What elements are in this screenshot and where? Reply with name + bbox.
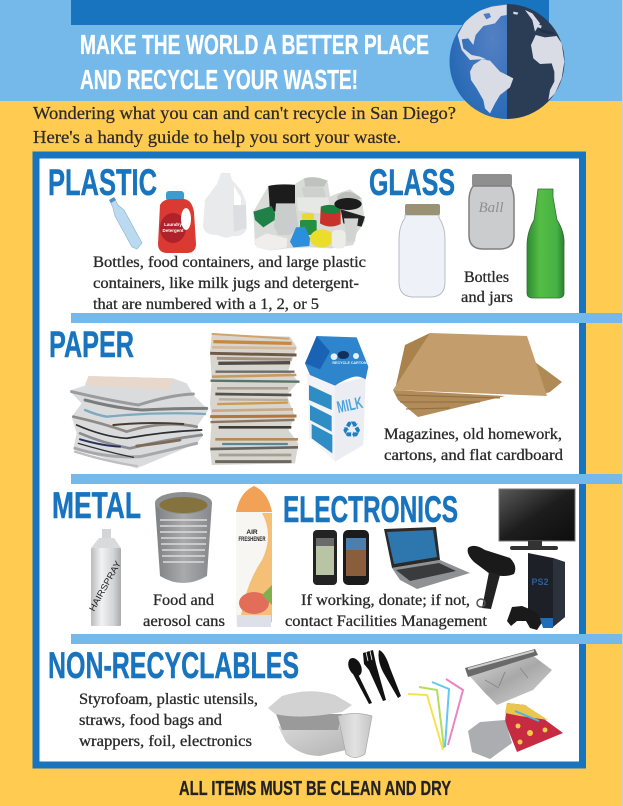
icon: hairspray can: HAIRSPRAY [87, 559, 123, 613]
icon: magazine stack [69, 376, 208, 468]
paper description: cartons, and flat cardboard [384, 447, 563, 464]
icon: detergent bottle: Detergent [162, 228, 184, 233]
glass description: Bottles [464, 269, 509, 286]
plastic description [93, 254, 366, 313]
panel: glass [369, 162, 564, 306]
icon: smartphones [313, 530, 369, 585]
icon: ball jar: Ball [478, 200, 504, 216]
icon: clear jar [399, 204, 445, 297]
icon: food wrapper [468, 703, 563, 759]
recycle mark: ♻ [342, 417, 362, 443]
heading: paper: PAPER [49, 324, 134, 365]
heading: metal: METAL [52, 485, 141, 526]
panel: plastic [48, 162, 366, 313]
non-recyclables description: wrappers, foil, electronics [79, 733, 252, 750]
icon: detergent bottle: Laundry [164, 222, 182, 227]
icon: foil roll [465, 649, 552, 705]
heading: non-recyclables: NON-RECYCLABLES [48, 645, 299, 686]
icon: air freshener: AIR [246, 529, 258, 536]
main frame [36, 155, 582, 765]
icon: plastic containers [253, 177, 365, 251]
non-recyclables description [79, 691, 258, 750]
icon: game console: PS2 [531, 577, 549, 587]
icon: milk jug [203, 173, 247, 238]
title: AND RECYCLE YOUR WASTE! [80, 64, 358, 95]
icon: hair dryer [468, 546, 515, 609]
plastic description: Bottles, food containers, and large plastic [93, 254, 366, 271]
icon: air freshener: FRESHENER [238, 537, 266, 543]
heading: electronics: ELECTRONICS [283, 489, 458, 530]
icon: milk carton: MILK [335, 393, 365, 417]
icon: cardboard [393, 333, 562, 417]
title: MAKE THE WORLD A BETTER PLACE [80, 29, 429, 60]
footer note: ALL ITEMS MUST BE CLEAN AND DRY [179, 777, 451, 800]
title [80, 29, 429, 95]
paper description [384, 426, 563, 464]
icon: plastic cutlery [346, 650, 401, 704]
panel: non-recyclables [48, 645, 563, 759]
panel: electronics [283, 489, 575, 630]
intro text: Here's a handy guide to help you sort your waste. [33, 127, 401, 147]
icon: straws [408, 679, 463, 750]
metal description: Food and [153, 592, 214, 609]
icon: globe [449, 4, 565, 120]
icon: hairspray can [87, 529, 123, 626]
electronics description: contact Facilities Management [285, 613, 488, 630]
icon: game controller [507, 606, 541, 630]
icon: laptop [384, 527, 470, 589]
icon: television [499, 489, 575, 550]
electronics description [285, 592, 488, 630]
metal description [143, 592, 225, 630]
panel: metal [52, 485, 272, 630]
icon: detergent bottle [158, 191, 196, 253]
plastic description: that are numbered with a 1, 2, or 5 [93, 296, 319, 313]
icon: air freshener [236, 486, 272, 627]
heading: plastic: PLASTIC [48, 162, 157, 203]
icon: ball jar [469, 174, 514, 249]
icon: paper stack [210, 334, 298, 465]
icon: game console [528, 553, 565, 628]
plastic description: containers, like milk jugs and detergent- [93, 275, 359, 292]
icon: milk carton [305, 336, 369, 462]
heading: glass: GLASS [369, 162, 455, 203]
metal description: aerosol cans [143, 613, 225, 630]
divider bars [71, 313, 622, 644]
glass description [461, 269, 513, 306]
icon: tin can [155, 492, 212, 583]
non-recyclables description: straws, food bags and [79, 712, 222, 729]
icon: water bottle [109, 197, 142, 249]
icon: milk carton: RECYCLE CARTONS [332, 361, 369, 365]
icon: foam cup [338, 714, 372, 758]
header band [0, 0, 622, 101]
intro text: Wondering what you can and can't recycle in San Diego? [33, 103, 456, 123]
panel: paper [49, 324, 563, 468]
icon: styrofoam box [268, 691, 352, 756]
icon: green bottle [527, 189, 564, 298]
paper description: Magazines, old homework, [384, 426, 562, 443]
glass description: and jars [461, 289, 513, 306]
non-recyclables description: Styrofoam, plastic utensils, [79, 691, 258, 708]
intro text [33, 103, 456, 147]
electronics description: If working, donate; if not, [301, 592, 470, 609]
